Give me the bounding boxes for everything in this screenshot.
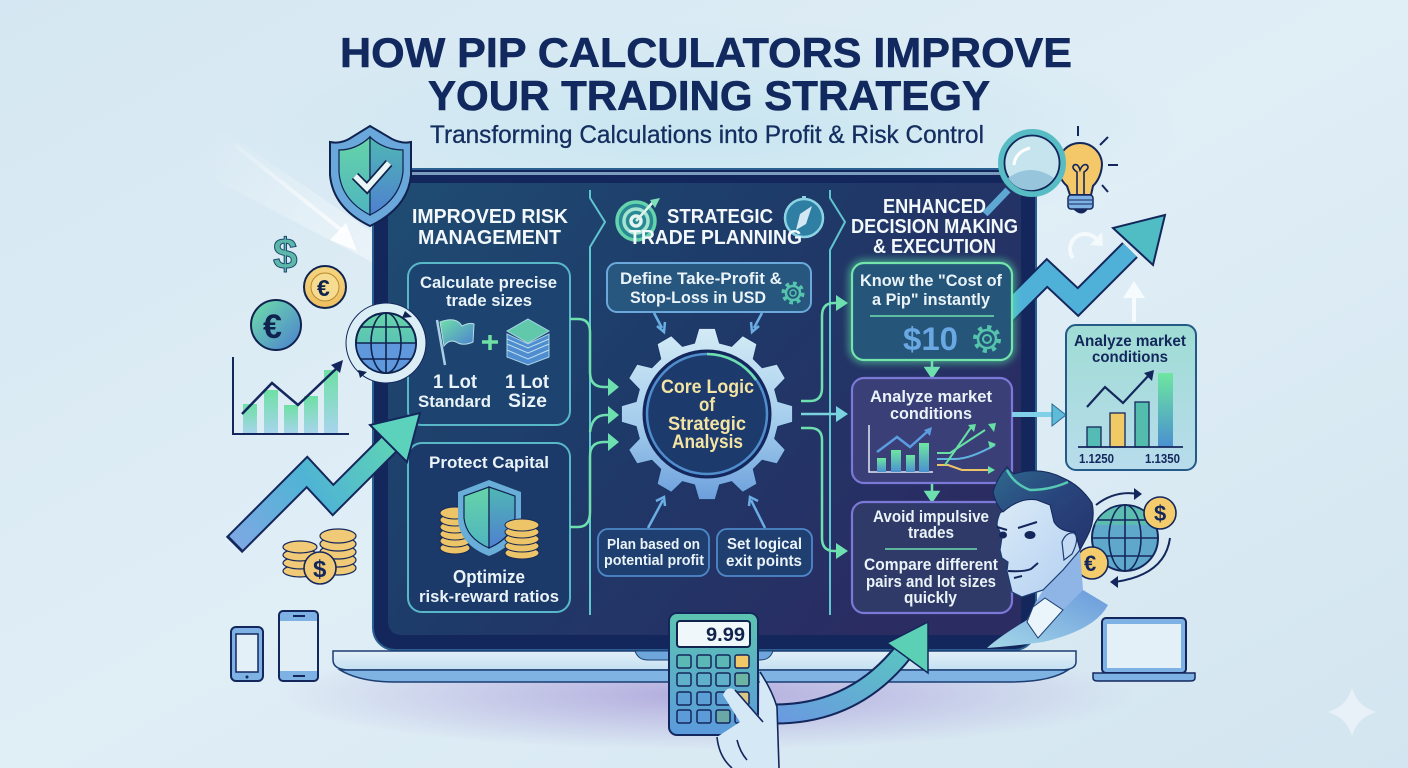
illustration: trader <box>987 467 1108 648</box>
icon: lot stack <box>507 319 549 365</box>
card: calculate precise trade sizes: Size <box>508 391 547 412</box>
heading: strategic trade planning: STRATEGIC <box>667 206 773 228</box>
icon: globe with rotating arrows <box>346 303 426 383</box>
gear: core logic of strategic analysis: Strategic <box>668 414 746 435</box>
icon: gear <box>976 328 998 350</box>
panel: market conditions chart <box>1066 325 1196 470</box>
laptop base <box>333 651 1076 682</box>
ear <box>1062 533 1077 560</box>
card: avoid impulsive trades: trades <box>908 523 954 542</box>
card: avoid impulsive trades: Compare different <box>864 555 998 574</box>
heading: enhanced decision making <box>851 196 1018 258</box>
icon: left coin stack <box>440 507 470 554</box>
laptop screen <box>373 169 1036 650</box>
card: calculate precise trade sizes: Standard <box>418 392 491 411</box>
arrow: up to growth arrow <box>1123 281 1145 322</box>
heading: improved risk management <box>412 206 569 249</box>
arrow down <box>926 360 938 377</box>
card: calculate precise trade sizes <box>408 263 570 425</box>
card: analyze market conditions <box>852 378 1012 483</box>
hair highlight <box>1007 470 1068 490</box>
heading: enhanced decision making: ENHANCED <box>883 196 986 218</box>
shirt collar <box>1027 598 1063 638</box>
bar chart <box>1078 370 1183 447</box>
gear: core logic of strategic analysis: Core Logic <box>661 377 754 398</box>
icon: plus <box>482 335 498 350</box>
neck <box>1033 550 1083 610</box>
heading: improved risk management: IMPROVED RISK <box>412 206 569 228</box>
shirt and shoulders <box>987 590 1108 648</box>
arrow: right growth arrow <box>1003 215 1165 317</box>
icon: hand pressing calculator <box>717 672 779 768</box>
card: plan based on potential profit: potential profit <box>604 552 704 569</box>
card: protect capital: risk-reward ratios <box>419 587 559 606</box>
chart: diverging arrows <box>937 423 996 474</box>
card: set logical exit points: exit points <box>726 553 802 570</box>
icon: green euro coin: € <box>263 308 282 346</box>
chart: mini bars <box>869 425 933 472</box>
icon: light bulb <box>1058 126 1118 214</box>
icon: right coin stack <box>505 519 539 559</box>
card: plan based on potential profit: Plan based on <box>607 536 700 553</box>
icon: refresh arrow <box>1070 232 1103 258</box>
icon: right globe with coins: $ <box>1154 501 1166 526</box>
arrow: left growth arrow <box>234 413 420 545</box>
title <box>340 29 1072 119</box>
card: avoid impulsive trades <box>852 502 1012 613</box>
card: avoid impulsive trades: pairs and lot sizes <box>866 572 996 591</box>
card: analyze market conditions: conditions <box>890 404 972 423</box>
icon: small gear <box>784 284 802 302</box>
icon: target <box>617 198 660 240</box>
card: protect capital <box>408 443 570 612</box>
card: calculate precise trade sizes: trade sizes <box>446 291 532 310</box>
facial features <box>997 522 1038 578</box>
card: set logical exit points <box>717 529 812 576</box>
panel: strategic trade planning <box>598 196 823 576</box>
gear: core logic of strategic analysis <box>621 328 793 500</box>
card: avoid impulsive trades: Avoid impulsive <box>873 507 989 526</box>
icon: small phone <box>231 627 263 681</box>
heading: enhanced decision making: & EXECUTION <box>873 236 996 258</box>
card: define take-profit and stop-loss <box>607 263 811 312</box>
card: protect capital: Protect Capital <box>429 453 549 472</box>
card: define take-profit and stop-loss: Define Take-Profit & <box>620 269 782 288</box>
flow arrows: left column to gear <box>570 319 619 527</box>
hair <box>993 467 1093 550</box>
card: cost of a pip <box>852 263 1012 360</box>
chart: left growth chart <box>233 357 349 434</box>
icon: magnifying glass <box>985 132 1063 214</box>
calculator keys <box>677 655 749 723</box>
heading: strategic trade planning: TRADE PLANNING <box>629 227 802 249</box>
icon: tall phone <box>279 611 318 681</box>
icon: green euro coin <box>251 300 301 350</box>
flow arrows: gear to right column <box>801 295 848 559</box>
arrow: curved arrow from calculator <box>770 622 928 714</box>
heading: enhanced decision making: DECISION MAKING <box>851 216 1018 238</box>
gear: core logic of strategic analysis: of <box>699 395 716 416</box>
icon: shield <box>458 480 521 556</box>
card: plan based on potential profit <box>598 529 709 576</box>
icon: shield with check <box>330 126 411 226</box>
arrows into gear <box>648 313 765 528</box>
subtitle: Transforming Calculations into Profit & Risk Control <box>430 121 984 149</box>
icon: dollar sign: $ <box>273 230 297 279</box>
arrow down <box>926 484 938 501</box>
icon: gold euro coin: € <box>317 275 330 301</box>
card: cost of a pip: $10 <box>903 321 958 357</box>
card: protect capital: Optimize <box>453 567 525 587</box>
face <box>997 495 1087 597</box>
icon: calculator <box>669 613 758 735</box>
card: calculate precise trade sizes: 1 Lot <box>433 372 478 393</box>
icon: right laptop <box>1093 618 1195 681</box>
card glow <box>852 263 1012 360</box>
panel: market conditions chart: Analyze market <box>1074 333 1187 350</box>
title: YOUR TRADING STRATEGY <box>428 72 990 119</box>
heading: strategic trade planning <box>629 206 802 249</box>
card: calculate precise trade sizes: 1 Lot <box>505 372 550 393</box>
icon: compass <box>785 196 823 237</box>
icon: coin stacks <box>283 529 356 584</box>
heading: improved risk management: MANAGEMENT <box>418 227 561 249</box>
gear: core logic of strategic analysis: Analysis <box>672 432 743 453</box>
icon: right globe with coins: € <box>1084 551 1096 576</box>
icon: gold euro coin <box>304 266 346 308</box>
icon: coin stacks: $ <box>313 556 327 583</box>
card: avoid impulsive trades: quickly <box>904 588 957 607</box>
column dividers <box>590 190 845 615</box>
panel: market conditions chart: 1.1350 <box>1145 451 1180 466</box>
icon: flag <box>437 320 474 365</box>
card: define take-profit and stop-loss: Stop-Loss in USD <box>630 288 766 307</box>
card: analyze market conditions: Analyze market <box>870 387 992 406</box>
card: calculate precise trade sizes: Calculate precise <box>420 273 557 292</box>
panel: market conditions chart: conditions <box>1092 349 1168 366</box>
title: HOW PIP CALCULATORS IMPROVE <box>340 29 1072 76</box>
calculator display: 9.99 <box>706 625 745 646</box>
card: cost of a pip: Know the "Cost of <box>860 271 1002 290</box>
arrow: to market panel <box>1012 404 1066 426</box>
beam arrow pointing at the screen <box>235 145 357 251</box>
watermark: sparkle <box>1328 688 1376 736</box>
panel: improved risk management <box>408 206 570 612</box>
icon: right globe with coins <box>1076 488 1176 588</box>
panel: market conditions chart: 1.1250 <box>1079 451 1114 466</box>
card: set logical exit points: Set logical <box>727 536 802 553</box>
card: cost of a pip: a Pip" instantly <box>872 290 991 309</box>
panel: enhanced decision making and execution <box>851 196 1018 613</box>
